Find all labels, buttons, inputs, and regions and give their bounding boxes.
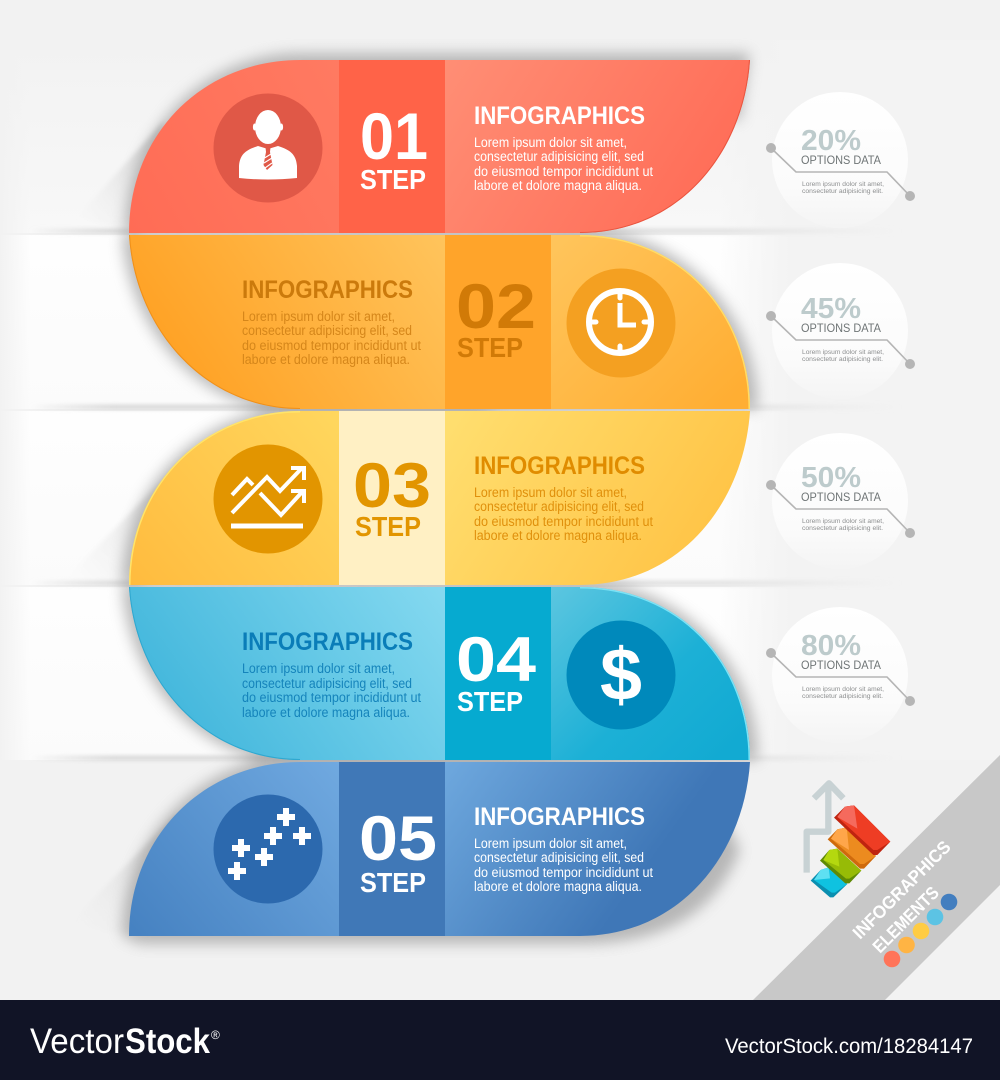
step label: STEP — [360, 867, 426, 898]
image id: VectorStock.com/18284147 — [725, 1035, 973, 1058]
body text: do eiusmod tempor incididunt ut — [474, 865, 653, 880]
body text: do eiusmod tempor incididunt ut — [474, 164, 653, 179]
option: 45% — [766, 263, 915, 399]
icon: person — [214, 94, 322, 202]
logo: Vector — [30, 1022, 124, 1061]
body text: do eiusmod tempor incididunt ut — [242, 690, 421, 705]
body text: consectetur adipisicing elit, sed — [242, 323, 412, 338]
step number 02: 02 — [456, 272, 536, 342]
icon: arrow with 3D bars — [807, 783, 890, 897]
body text: consectetur adipisicing elit, sed — [474, 850, 644, 865]
body text: Lorem ipsum dolor sit amet, — [474, 485, 627, 500]
icon: plus signs — [214, 794, 322, 904]
option: 80%: 80% — [801, 630, 861, 662]
footer bar — [0, 1000, 1000, 1080]
step number 04: 04 — [456, 625, 536, 695]
option: 45%: OPTIONS DATA — [801, 323, 881, 335]
body text: labore et dolore magna aliqua. — [242, 352, 410, 367]
step number 03: 03 — [353, 451, 431, 521]
body text: do eiusmod tempor incididunt ut — [474, 514, 653, 529]
body text: do eiusmod tempor incididunt ut — [242, 338, 421, 353]
soft band shadows — [122, 53, 758, 944]
option: 20%: OPTIONS DATA — [801, 155, 881, 167]
panel: step 01 — [129, 60, 750, 233]
body text: Lorem ipsum dolor sit amet, — [474, 135, 627, 150]
step number 05: 05 — [359, 804, 437, 874]
option: 80%: OPTIONS DATA — [801, 660, 881, 672]
corner ribbon — [753, 755, 1000, 1000]
option: 80%: consectetur adipisicing elit. — [802, 693, 883, 700]
panel: step 04 — [129, 587, 750, 760]
panel: step 05 — [129, 762, 750, 936]
heading: INFOGRAPHICS — [474, 803, 645, 831]
step label: STEP — [355, 511, 421, 542]
step label: STEP — [457, 686, 523, 717]
heading: INFOGRAPHICS — [474, 102, 645, 130]
option: 20% — [766, 92, 915, 228]
option: 20%: 20% — [801, 125, 861, 157]
option: 50%: 50% — [801, 462, 861, 494]
option: 20%: Lorem ipsum dolor sit amet, — [802, 181, 884, 188]
body text: labore et dolore magna aliqua. — [474, 879, 642, 894]
body text: Lorem ipsum dolor sit amet, — [242, 309, 395, 324]
grey arrow — [807, 783, 843, 873]
heading: INFOGRAPHICS — [474, 452, 645, 480]
colour dots — [884, 894, 957, 967]
panel: step 03 — [129, 411, 750, 585]
body text: labore et dolore magna aliqua. — [474, 178, 642, 193]
option: 80% — [766, 607, 915, 743]
option: 50%: Lorem ipsum dolor sit amet, — [802, 518, 884, 525]
icon: chart arrows — [214, 444, 322, 554]
step label: STEP — [457, 332, 523, 363]
body text: Lorem ipsum dolor sit amet, — [474, 836, 627, 851]
body text: consectetur adipisicing elit, sed — [474, 499, 644, 514]
option: 45%: consectetur adipisicing elit. — [802, 356, 883, 363]
body text: consectetur adipisicing elit, sed — [242, 676, 412, 691]
logo — [30, 1022, 220, 1061]
body text — [242, 661, 421, 720]
body text: Lorem ipsum dolor sit amet, — [242, 661, 395, 676]
logo: ® — [211, 1028, 220, 1042]
option: 45%: Lorem ipsum dolor sit amet, — [802, 349, 884, 356]
orange bar — [828, 827, 876, 869]
ribbon title: INFOGRAPHICS — [849, 837, 955, 943]
body text: labore et dolore magna aliqua. — [474, 528, 642, 543]
option: 80%: Lorem ipsum dolor sit amet, — [802, 686, 884, 693]
option: 50% — [766, 433, 915, 569]
green bar — [820, 849, 861, 883]
step label: STEP — [360, 164, 426, 195]
heading: INFOGRAPHICS — [242, 628, 413, 656]
body text — [242, 309, 421, 367]
step number 01: 01 — [360, 99, 428, 173]
option: 20%: consectetur adipisicing elit. — [802, 188, 883, 195]
option: 45%: 45% — [801, 293, 861, 325]
body text — [474, 836, 653, 894]
icon: dollar: $ — [600, 633, 642, 716]
ribbon subtitle: ELEMENTS — [869, 883, 943, 957]
logo: Stock — [125, 1022, 210, 1061]
option: 50%: OPTIONS DATA — [801, 492, 881, 504]
red bar — [834, 805, 890, 855]
cyan bar — [811, 867, 847, 897]
body text — [474, 135, 653, 193]
body text — [474, 485, 653, 543]
heading: INFOGRAPHICS — [242, 276, 413, 304]
body text: labore et dolore magna aliqua. — [242, 705, 410, 720]
icon: clock — [566, 268, 676, 378]
diagonal long shadows — [60, 120, 192, 936]
panel: step 02 — [129, 235, 750, 409]
icon: dollar — [566, 620, 676, 730]
body text: consectetur adipisicing elit, sed — [474, 149, 644, 164]
option: 50%: consectetur adipisicing elit. — [802, 525, 883, 532]
